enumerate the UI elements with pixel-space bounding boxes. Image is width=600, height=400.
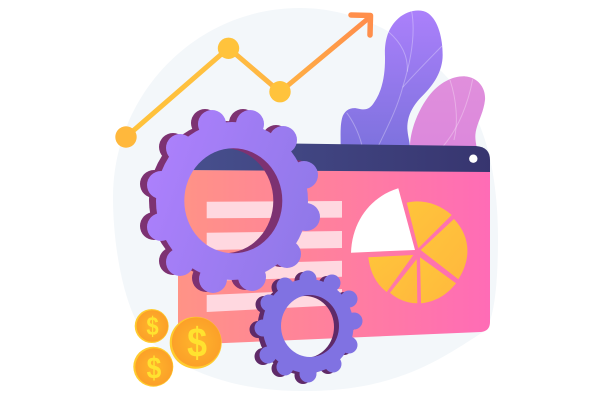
small gear depth	[250, 272, 358, 384]
background blob	[113, 8, 498, 391]
trend line	[126, 17, 370, 137]
coin: bottom	[133, 347, 173, 387]
arrow head	[351, 15, 370, 35]
data point 1	[115, 126, 137, 148]
window title bar	[178, 142, 490, 172]
large gear	[140, 109, 320, 293]
coin: bottom: $	[147, 351, 161, 386]
illustration	[113, 8, 498, 391]
leaf: pink	[410, 76, 485, 147]
text rows	[207, 201, 342, 312]
window button	[469, 154, 477, 163]
pie chart	[351, 188, 467, 303]
leaf: purple	[341, 11, 443, 147]
pie slices: orange	[368, 201, 467, 303]
coin: large: $	[187, 320, 207, 367]
small gear	[250, 270, 362, 384]
window body	[178, 170, 490, 345]
gear depth	[140, 109, 313, 292]
dashboard window	[178, 142, 490, 345]
coin: large	[170, 317, 222, 369]
gear face	[147, 110, 320, 293]
data point 2	[218, 38, 239, 59]
pie slice: white	[351, 188, 415, 253]
coin: small top	[135, 309, 169, 343]
coin: small top: $	[146, 312, 159, 341]
growth line chart	[115, 15, 370, 148]
small gear face	[254, 270, 362, 382]
data point 3	[269, 81, 291, 102]
